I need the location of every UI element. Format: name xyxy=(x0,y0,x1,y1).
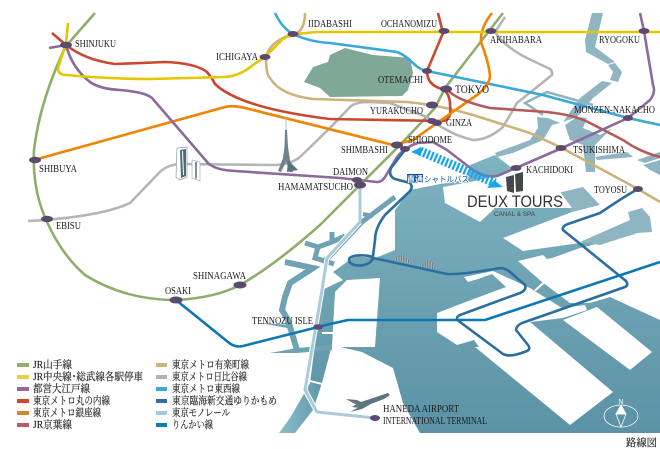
shuttle bus label xyxy=(407,174,469,184)
station labels: GINZA xyxy=(446,118,473,129)
legend item: Yamanote xyxy=(17,358,72,371)
legend item: Tozai: 東京メトロ東西線 xyxy=(172,382,240,395)
station labels: OTEMACHI xyxy=(378,75,424,86)
legend item: Marunouchi xyxy=(17,394,110,407)
station labels: OSAKI xyxy=(165,286,191,297)
shuttle bus label: 直通 xyxy=(407,174,423,184)
line: Monorail xyxy=(305,188,375,418)
line: Keiyo xyxy=(447,89,660,157)
station labels: INTERNATIONAL TERMINAL xyxy=(383,416,487,427)
caption: route map: 路線図 xyxy=(626,436,657,449)
station labels: SHIBUYA xyxy=(39,164,78,175)
line: Oedo xyxy=(49,13,654,182)
legend item: Chuo-Sobu xyxy=(17,370,143,383)
legend item: Ginza: 東京メトロ銀座線 xyxy=(33,406,101,419)
station labels: KACHIDOKI xyxy=(526,165,573,176)
line: shuttle bus arrow xyxy=(411,147,503,188)
legend item: Ginza xyxy=(17,406,101,419)
icon: tokyo tower xyxy=(278,117,298,172)
legend item: Yurakucho: 東京メトロ有楽町線 xyxy=(172,358,249,371)
map water and land xyxy=(260,13,660,433)
station labels: DAIMON xyxy=(333,167,369,178)
line: Yamanote xyxy=(34,13,503,300)
legend item: Oedo xyxy=(17,382,90,395)
line: Marunouchi xyxy=(52,13,450,121)
reclaimed land xyxy=(332,165,660,425)
line: Chuo-Sobu xyxy=(58,23,660,79)
station labels: TOKYO xyxy=(455,84,489,96)
line: Yurikamome xyxy=(349,150,638,355)
station labels: ICHIGAYA xyxy=(216,52,259,63)
west canals xyxy=(260,197,395,353)
light wedge channel xyxy=(580,208,652,245)
legend item: Rinkai: りんかい線 xyxy=(172,418,213,431)
legend item: Keiyo: JR京葉線 xyxy=(33,418,72,431)
station labels: EBISU xyxy=(56,221,82,232)
south canal xyxy=(279,383,322,433)
legend item: Monorail xyxy=(156,406,230,419)
sea xyxy=(310,155,660,433)
station labels: TSUKISHIMA xyxy=(573,145,626,156)
station labels: AKIHABARA xyxy=(490,35,543,46)
logo: Deux Tours xyxy=(467,192,563,218)
legend item: Rinkai xyxy=(156,418,213,431)
station labels: SHIODOME xyxy=(408,135,452,146)
line: Yurakucho xyxy=(266,13,660,202)
line: Rinkai xyxy=(176,262,660,346)
icon: compass: N xyxy=(618,399,624,406)
bridges xyxy=(310,282,545,385)
line: Hibiya xyxy=(28,17,552,221)
station labels: IIDABASHI xyxy=(308,19,353,30)
station labels: TENNOZU ISLE xyxy=(252,316,313,327)
logo: Deux Tours: CANAL & SPA xyxy=(494,211,536,218)
icon: airplane xyxy=(346,393,390,412)
station labels: RYOGOKU xyxy=(599,35,641,46)
legend item: Chuo-Sobu: JR中央線･総武線各駅停車 xyxy=(33,370,143,383)
legend item: Yurakucho xyxy=(156,358,249,371)
legend item: Yurikamome xyxy=(156,394,277,407)
station labels: SHIMBASHI xyxy=(341,145,389,156)
icon: twin skyscrapers xyxy=(176,147,200,181)
logo: Deux Tours: DEUX TOURS xyxy=(467,192,563,211)
legend xyxy=(17,358,277,431)
legend item: Marunouchi: 東京メトロ丸の内線 xyxy=(33,394,110,407)
station labels: HANEDA AIRPORT xyxy=(383,404,460,415)
station labels: SHINJUKU xyxy=(75,39,117,50)
legend item: Hibiya xyxy=(156,370,247,383)
shuttle bus label: シャトルバス xyxy=(424,175,469,184)
legend item: Hibiya: 東京メトロ日比谷線 xyxy=(172,370,247,383)
palace garden xyxy=(304,48,413,97)
station labels: YURAKUCHO xyxy=(370,106,423,117)
Sumida river and inner canals xyxy=(495,13,660,212)
icon: rainbow bridge xyxy=(393,254,438,270)
legend item: Tozai xyxy=(156,382,240,395)
station labels: TOYOSU xyxy=(594,185,628,196)
icon: compass xyxy=(604,399,638,427)
legend item: Yamanote: JR山手線 xyxy=(33,358,72,371)
station labels: SHINAGAWA xyxy=(193,271,247,282)
thin canals xyxy=(525,92,593,115)
legend item: Keiyo xyxy=(17,418,72,431)
line: Ginza xyxy=(34,13,492,160)
legend item: Yurikamome: 東京臨海新交通ゆりかもめ xyxy=(172,394,277,407)
line: Tozai xyxy=(275,13,660,125)
legend item: Monorail: 東京モノレール xyxy=(172,406,230,419)
station labels: OCHANOMIZU xyxy=(381,19,438,30)
legend item: Oedo: 都営大江戸線 xyxy=(33,382,90,395)
station labels: HAMAMATSUCHO xyxy=(278,182,353,193)
icon: Deux Tours towers xyxy=(506,172,523,193)
